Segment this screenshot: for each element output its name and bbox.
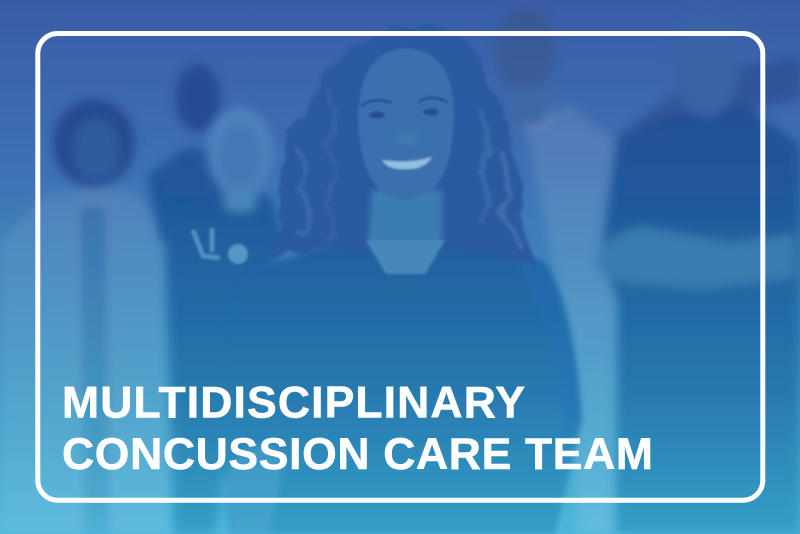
- photo: central woman's face and neck: [358, 48, 454, 274]
- photo: blonde woman in dark scrubs: [166, 108, 285, 534]
- title: MULTIDISCIPLINARY: [62, 378, 525, 428]
- photo: nose: [395, 131, 419, 145]
- photo: doctor with white coat, back right: [495, 6, 628, 534]
- photo: doctor at far left: [0, 99, 170, 534]
- photo: eyebrows: [361, 98, 448, 106]
- photo: stethoscope: [193, 228, 248, 264]
- title: [62, 378, 653, 479]
- photo: central woman's curly hair: [268, 26, 540, 268]
- photo: eyes: [369, 108, 439, 118]
- photo: man in dark scrubs, back row: [147, 64, 225, 260]
- frame: [38, 34, 763, 500]
- photo: smile: [382, 157, 432, 169]
- title: CONCUSSION CARE TEAM: [62, 430, 653, 479]
- photo: man with crossed arms, far right: [596, 7, 800, 534]
- photo: central woman's scrubs: [212, 238, 582, 534]
